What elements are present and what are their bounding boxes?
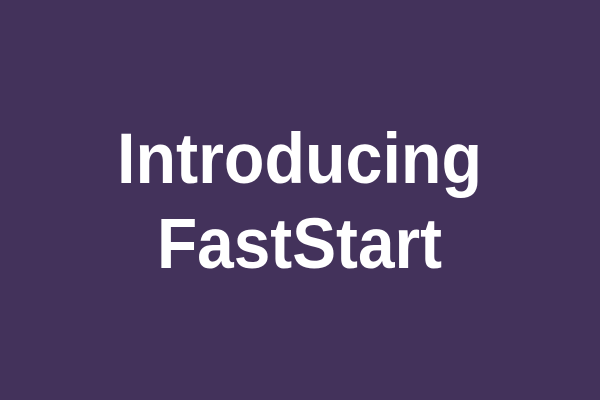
title: Introducing FastStart [117, 120, 482, 284]
heading line 2: FastStart [157, 205, 442, 284]
heading line 1: Introducing [117, 120, 482, 199]
